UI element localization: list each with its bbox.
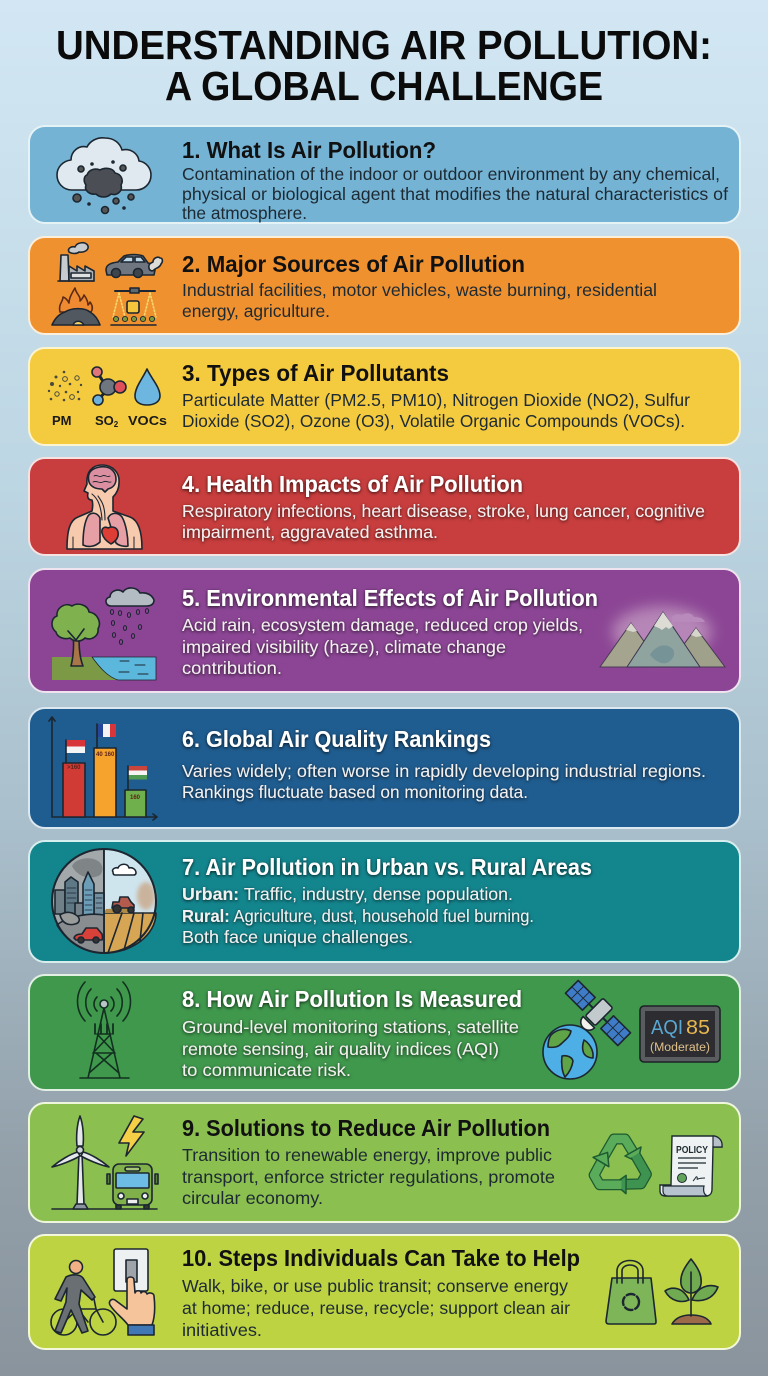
text: section 4	[182, 471, 705, 542]
panel 4: health impacts	[29, 458, 740, 555]
text: section 1: Contamination of the indoor or outdoor environment by any chemical,	[182, 164, 720, 184]
text: section 9: circular economy.	[182, 1188, 323, 1208]
text: section 10: 10. Steps Individuals Can Take to Help	[182, 1245, 580, 1271]
icon: recycling arrows	[586, 1139, 652, 1198]
icon: monitoring tower	[78, 982, 130, 1078]
text: section 3: 3. Types of Air Pollutants	[182, 360, 449, 386]
text: section 5: Acid rain, ecosystem damage, reduced crop yields,	[182, 615, 583, 635]
text: section 5: impaired visibility (haze), climate change	[182, 637, 506, 657]
labels: pollutant names	[52, 413, 167, 429]
text: section 2: 2. Major Sources of Air Pollution	[182, 251, 525, 277]
icon: reusable bag	[606, 1260, 656, 1324]
panel 5: environmental effects	[29, 569, 740, 692]
text: section 6: 6. Global Air Quality Rankings	[182, 726, 491, 752]
bar value labels: 40 160	[96, 752, 115, 758]
icon: waste burning	[52, 288, 100, 325]
text: section 10	[182, 1245, 580, 1340]
icon: lightning bolt	[119, 1116, 144, 1156]
icon: droplet	[135, 369, 160, 405]
icon: person walking with bike	[51, 1260, 116, 1335]
text: section 2: energy, agriculture.	[182, 301, 330, 321]
icon: pollution cloud	[57, 138, 151, 214]
AQI display: AQI	[651, 1017, 683, 1039]
labels: pollutant names: PM	[52, 413, 72, 428]
text: section 9: Transition to renewable energy, improve public	[182, 1145, 552, 1165]
labels: pollutant names: 2	[114, 420, 119, 429]
icon: molecule	[92, 367, 126, 405]
panel 10: individual steps	[29, 1235, 740, 1349]
text: section 1: 1. What Is Air Pollution?	[182, 137, 436, 163]
bar chart: country rankings	[49, 717, 157, 820]
text: section 6: Varies widely; often worse in rapidly developing industrial regions.	[182, 761, 706, 781]
panel 1: what is air pollution	[29, 126, 740, 223]
text: section 8: 8. How Air Pollution Is Measured	[182, 986, 522, 1012]
text: section 6	[182, 726, 706, 802]
text: section 10: initiatives.	[182, 1320, 262, 1340]
text: section 7: Both face unique challenges.	[182, 927, 413, 947]
text: section 9: transport, enforce stricter regulations, promote	[182, 1167, 555, 1187]
AQI display: (Moderate)	[650, 1042, 710, 1054]
text: section 4: impairment, aggravated asthma.	[182, 522, 438, 542]
icon: satellite	[557, 977, 634, 1054]
icon: policy document: POLICY	[676, 1144, 708, 1156]
text: section 5: 5. Environmental Effects of Air Pollution	[182, 585, 598, 611]
labels: pollutant names: VOCs	[128, 413, 167, 428]
text: section 9: 9. Solutions to Reduce Air Pollution	[182, 1115, 550, 1141]
text: section 8: Ground-level monitoring stations, satellite	[182, 1017, 519, 1037]
icon: sprout	[665, 1259, 718, 1324]
text: section 2	[182, 251, 657, 321]
text: section 5: contribution.	[182, 658, 282, 678]
icon: earth	[543, 1025, 597, 1079]
icon: electric bus	[107, 1164, 158, 1209]
icon: particulate matter	[48, 371, 82, 401]
panel 2: major sources	[29, 237, 740, 334]
text: section 5	[182, 585, 598, 678]
title: UNDERSTANDING AIR POLLUTION:	[56, 22, 712, 68]
bar value labels: 160	[130, 795, 141, 801]
AQI display	[640, 1006, 720, 1062]
text: section 3: Dioxide (SO2), Ozone (O3), Volatile Organic Compounds (VOCs).	[182, 411, 685, 431]
text: section 3: Particulate Matter (PM2.5, PM10), Nitrogen Dioxide (NO2), Sulfur	[182, 390, 690, 410]
text: section 7: Urban: Traffic, industry, dense population.	[182, 884, 513, 904]
title	[56, 22, 712, 109]
icon: car	[106, 254, 162, 278]
text: section 10: at home; reduce, reuse, recycle; support clean air	[182, 1298, 570, 1318]
panel 9: solutions	[29, 1103, 740, 1222]
labels: pollutant names: SO	[95, 413, 114, 428]
text: section 7: 7. Air Pollution in Urban vs. Rural Areas	[182, 854, 592, 880]
text: section 8: remote sensing, air quality indices (AQI)	[182, 1039, 499, 1059]
text: section 1	[182, 137, 728, 223]
icon: tree, acid rain and lake	[52, 588, 156, 680]
bar value labels	[67, 752, 141, 801]
icon: human body with lungs, heart and brain	[67, 465, 142, 549]
panel 3: types of pollutants	[29, 348, 740, 445]
text: section 1: the atmosphere.	[182, 203, 307, 223]
title: A GLOBAL CHALLENGE	[165, 63, 603, 109]
AQI display: 85	[686, 1017, 710, 1039]
icon: wind turbine	[52, 1116, 157, 1209]
icon: factory	[58, 243, 94, 281]
panel 6: global rankings	[29, 708, 740, 828]
text: section 4: Respiratory infections, heart disease, stroke, lung cancer, cognitive	[182, 501, 705, 521]
text: section 3	[182, 360, 690, 431]
text: section 10: Walk, bike, or use public transit; conserve energy	[182, 1276, 568, 1296]
text: section 8	[182, 986, 522, 1080]
text: section 7: Rural: Agriculture, dust, household fuel burning.	[182, 906, 534, 926]
icon: policy document	[660, 1136, 722, 1196]
text: section 9	[182, 1115, 555, 1208]
panel 8: how it is measured	[29, 975, 740, 1090]
panel 7: urban vs rural	[29, 841, 740, 962]
text: section 7	[182, 854, 592, 947]
text: section 8: to communicate risk.	[182, 1060, 351, 1080]
icon: hazy mountains	[600, 606, 725, 667]
text: section 2: Industrial facilities, motor vehicles, waste burning, residential	[182, 280, 657, 300]
text: section 4: 4. Health Impacts of Air Pollution	[182, 471, 523, 497]
text: section 1: physical or biological agent that modifies the natural characteristics of	[182, 184, 728, 204]
text: section 6: Rankings fluctuate based on monitoring data.	[182, 782, 528, 802]
bar value labels: >160	[67, 765, 81, 771]
icon: crop sprayer	[111, 288, 156, 325]
icon: light switch and hand	[109, 1249, 155, 1335]
icon: urban and rural split circle	[52, 849, 156, 953]
